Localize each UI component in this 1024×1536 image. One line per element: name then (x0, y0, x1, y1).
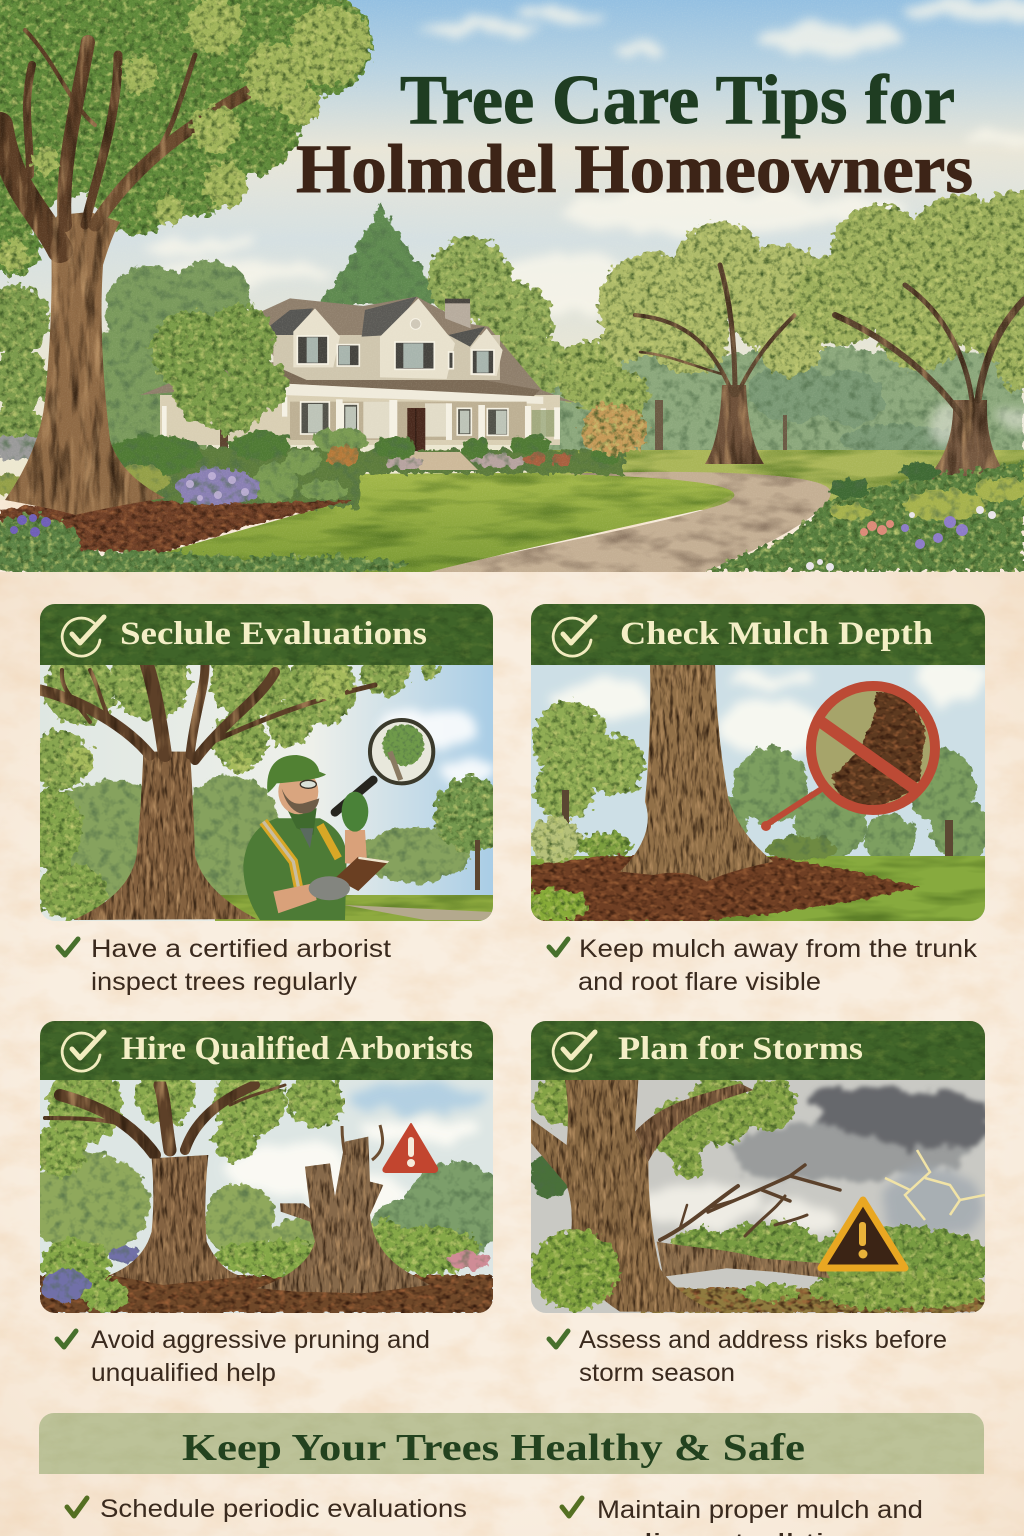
tip: keep mulch away: and root flare visible (578, 968, 821, 996)
tip: avoid aggressive pruning: unqualified help (91, 1359, 276, 1387)
foundation shrubs (0, 404, 648, 508)
background treeline (540, 345, 1024, 456)
sky with clouds (0, 0, 1024, 500)
main lawn (130, 472, 745, 572)
panel: schedule evaluations (22, 604, 506, 996)
panel: plan for storms (530, 1021, 995, 1387)
illustration: storm and fallen limb (530, 1074, 995, 1313)
warning triangle yellow (821, 1200, 905, 1268)
tip: certified arborist: inspect trees regularly (91, 968, 358, 996)
right trees (598, 190, 1024, 480)
tip: certified arborist (58, 935, 391, 996)
header: Seclule Evaluations (40, 604, 493, 665)
illustration: arborist inspecting tree (40, 665, 493, 921)
arborist figure (243, 720, 433, 920)
header: Hire Qualified Arborists: Hire Qualified Arborists (121, 1031, 473, 1067)
summary list (67, 1495, 923, 1536)
tip: avoid aggressive pruning (57, 1326, 430, 1387)
far lawn (540, 450, 1024, 510)
icon: check badge (553, 1032, 595, 1071)
hero grain (0, 0, 1024, 572)
house (140, 297, 575, 451)
panel: check mulch depth (523, 604, 990, 996)
header: Check Mulch Depth: Check Mulch Depth (620, 616, 933, 652)
foreground plants left (0, 514, 410, 579)
tip: assess risks: Assess and address risks before (579, 1326, 947, 1354)
summary banner (39, 1413, 984, 1474)
hero illustration (0, 0, 1024, 579)
illustration: tree with mulch volcano (523, 658, 990, 921)
tip: keep mulch away: Keep mulch away from the trunk (579, 935, 978, 963)
front yard tree (150, 305, 288, 460)
illustration: healthy tree and topped stump (30, 1064, 505, 1313)
trunk and limbs of left tree (0, 30, 255, 515)
driveway path (430, 472, 831, 572)
tip: certified arborist: Have a certified arborist (91, 935, 391, 963)
panel: hire qualified arborists (30, 1021, 505, 1387)
header: Check Mulch Depth (531, 604, 985, 665)
large left tree (0, 0, 372, 515)
icon: check badge (553, 617, 595, 656)
pine and trees behind house (0, 205, 649, 460)
no-mulch prohibition sign (761, 686, 935, 831)
mulch bed (0, 495, 355, 552)
warning triangle red (383, 1124, 437, 1172)
header: Seclule Evaluations: Seclule Evaluations (120, 616, 427, 652)
right flower bed (705, 462, 1024, 572)
tip: keep mulch away (549, 935, 978, 996)
tip: assess risks: storm season (579, 1359, 735, 1387)
icon: check badge (62, 1032, 104, 1071)
title: Tree Care Tips for (400, 62, 955, 139)
icon: check badge (62, 617, 104, 656)
summary list: Schedule periodic evaluations (100, 1495, 467, 1523)
tip: avoid aggressive pruning: Avoid aggressive pruning and (91, 1326, 430, 1354)
summary banner: Keep Your Trees Healthy & Safe (182, 1427, 805, 1469)
header: Plan for Storms (531, 1021, 985, 1080)
summary list: Maintain proper mulch and (597, 1496, 923, 1524)
title (296, 62, 973, 207)
header: Hire Qualified Arborists (40, 1021, 493, 1080)
header: Plan for Storms: Plan for Storms (618, 1031, 863, 1067)
tip: assess risks (549, 1326, 947, 1387)
title: Holmdel Homeowners (296, 131, 973, 207)
